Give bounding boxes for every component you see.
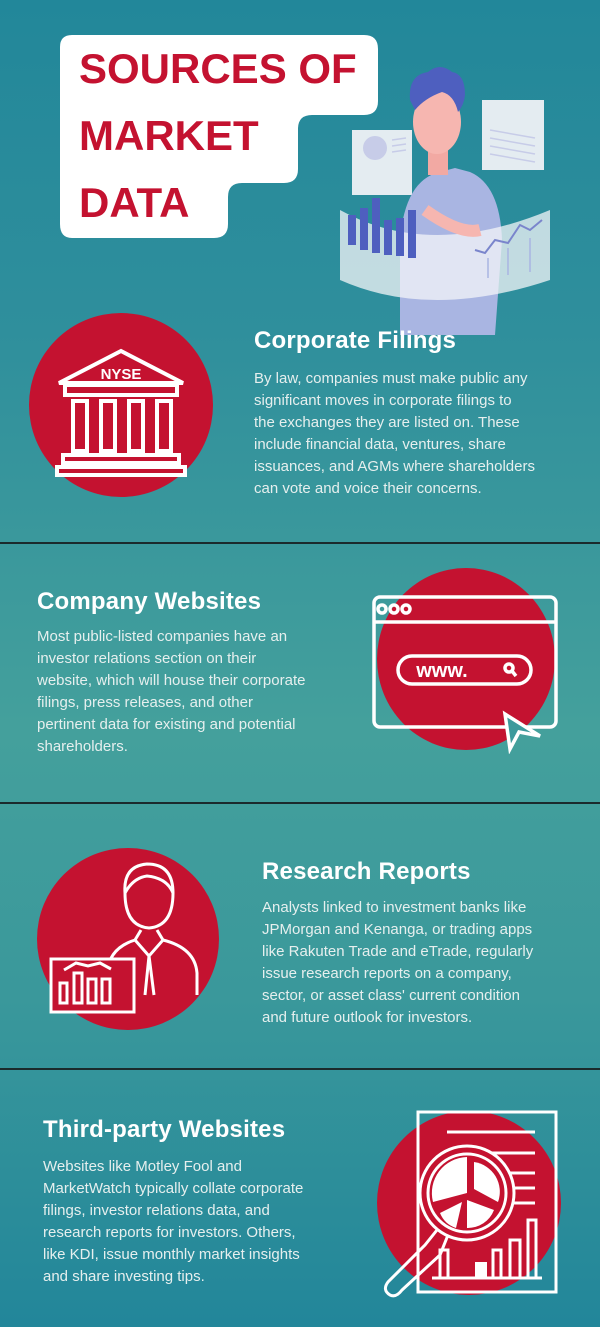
- body text: research reports for investors. Others,: [43, 1224, 296, 1241]
- title text: [79, 45, 357, 226]
- body text: like KDI, issue monthly market insights: [43, 1246, 300, 1263]
- body text: include financial data, ventures, share: [254, 436, 506, 453]
- body text: and future outlook for investors.: [262, 1009, 472, 1026]
- body text: [262, 899, 534, 1026]
- panel: third-party websites: [43, 1110, 561, 1298]
- body text: MarketWatch typically collate corporate: [43, 1180, 303, 1197]
- icon: browser window: www.: [415, 660, 468, 682]
- body text: filings, investor relations data, and: [43, 1202, 270, 1219]
- heading: Research Reports: [262, 858, 471, 885]
- title box: [60, 35, 378, 238]
- title text: SOURCES OF: [79, 45, 357, 92]
- body text: significant moves in corporate filings to: [254, 392, 512, 409]
- icon: magnifier over report: [377, 1110, 561, 1298]
- body text: issue research reports on a company,: [262, 965, 512, 982]
- body text: shareholders.: [37, 738, 128, 755]
- body text: like Rakuten Trade and eTrade, regularly: [262, 943, 533, 960]
- icon: analyst with chart: [37, 848, 219, 1030]
- body text: filings, press releases, and other: [37, 694, 253, 711]
- body text: pertinent data for existing and potential: [37, 716, 296, 733]
- illustration: man with data screens: [340, 67, 550, 335]
- body text: [43, 1158, 303, 1285]
- panel: research reports: [37, 848, 534, 1030]
- body text: and share investing tips.: [43, 1268, 205, 1285]
- heading: Company Websites: [37, 588, 261, 615]
- icon: browser window: [372, 568, 558, 754]
- panel: company websites: [37, 568, 558, 755]
- body text: can vote and voice their concerns.: [254, 480, 482, 497]
- man: [400, 168, 502, 335]
- body text: Websites like Motley Fool and: [43, 1158, 242, 1175]
- icon: NYSE building: [29, 313, 213, 497]
- body text: investor relations section on their: [37, 650, 256, 667]
- body text: JPMorgan and Kenanga, or trading apps: [262, 921, 532, 938]
- icon: NYSE building: NYSE: [101, 366, 141, 383]
- body text: [37, 628, 305, 755]
- heading: Third-party Websites: [43, 1116, 285, 1143]
- body text: [254, 370, 535, 497]
- body text: By law, companies must make public any: [254, 370, 527, 387]
- body text: sector, or asset class' current condition: [262, 987, 520, 1004]
- title text: MARKET: [79, 112, 259, 159]
- body text: website, which will house their corporate: [37, 672, 305, 689]
- body text: the exchanges they are listed on. These: [254, 414, 520, 431]
- body text: issuances, and AGMs where shareholders: [254, 458, 535, 475]
- heading: Corporate Filings: [254, 327, 456, 354]
- body text: Most public-listed companies have an: [37, 628, 287, 645]
- panel: corporate filings: [29, 313, 535, 497]
- title text: DATA: [79, 179, 189, 226]
- body text: Analysts linked to investment banks like: [262, 899, 526, 916]
